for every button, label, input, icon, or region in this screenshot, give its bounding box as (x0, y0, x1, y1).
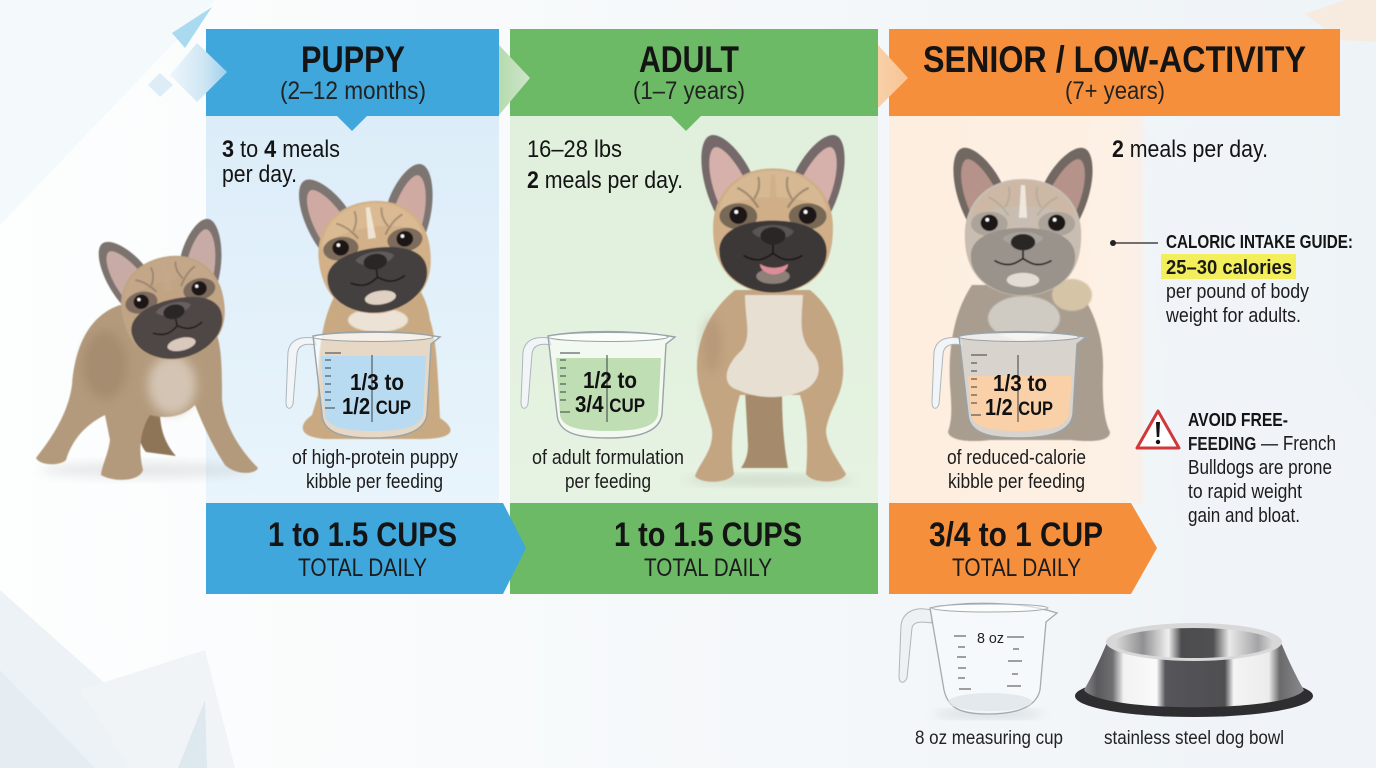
icon: 8 oz measuring cup: 8 oz (977, 630, 1004, 647)
caption: measuring cup: 8 oz measuring cup (915, 728, 1063, 749)
dog: senior (948, 148, 1110, 441)
dog: adult (685, 135, 855, 485)
measuring cup: adult: 1/2 to (583, 367, 637, 393)
callout: avoid free-feeding: gain and bloat. (1188, 505, 1300, 527)
header: adult: (1–7 years) (633, 77, 745, 105)
measuring cup: senior (932, 332, 1086, 438)
footer: senior total: TOTAL DAILY (952, 554, 1081, 582)
caption: dog bowl: stainless steel dog bowl (1104, 728, 1284, 749)
header: senior (889, 29, 1340, 116)
senior portion caption: kibble per feeding (948, 471, 1085, 493)
puppy portion caption: of high-protein puppy (292, 447, 458, 469)
icon: warning triangle (1137, 411, 1179, 448)
adult meals text (527, 136, 683, 194)
measuring cup: senior: 1/2 CUP (985, 394, 1053, 420)
puppy meals text: 3 to 4 meals (222, 136, 340, 163)
measuring cup: puppy (286, 332, 440, 438)
footer: adult total (510, 503, 878, 594)
footer: adult total: TOTAL DAILY (644, 554, 772, 582)
footer: puppy total: 1 to 1.5 CUPS (268, 516, 457, 554)
senior meals text: 2 meals per day. (1112, 136, 1268, 163)
callout: avoid free-feeding (1188, 410, 1336, 527)
measuring cup: adult (521, 332, 675, 438)
panel: senior background (889, 116, 1143, 504)
footer: senior total (889, 503, 1157, 594)
puppy portion caption (292, 447, 458, 493)
icon: 8 oz measuring cup (899, 603, 1057, 718)
footer: puppy total: TOTAL DAILY (298, 554, 427, 582)
panel: adult background (510, 116, 878, 504)
arrow: adult to senior (878, 45, 908, 108)
adult meals text: 16–28 lbs (527, 136, 622, 163)
dog: sitting puppy (297, 163, 451, 439)
callout: caloric intake guide: 25–30 calories (1166, 257, 1292, 279)
callout: avoid free-feeding: Bulldogs are prone (1188, 457, 1332, 479)
header: puppy (206, 29, 499, 131)
callout: avoid free-feeding: to rapid weight (1188, 481, 1302, 503)
measuring cup: adult: 3/4 CUP (575, 391, 645, 417)
header: puppy: PUPPY (301, 39, 405, 80)
header: senior: (7+ years) (1065, 77, 1165, 105)
footer: senior total: 3/4 to 1 CUP (929, 516, 1103, 554)
measuring cup: puppy: 1/2 CUP (342, 393, 411, 419)
adult portion caption (532, 447, 684, 493)
adult portion caption: of adult formulation (532, 447, 684, 469)
measuring cup: senior: 1/3 to (993, 370, 1047, 396)
decorative blue arrow shapes (148, 7, 227, 102)
panel: puppy background (206, 116, 499, 504)
header: senior: SENIOR / LOW-ACTIVITY (923, 39, 1306, 80)
measuring cup: puppy: 1/3 to (350, 369, 404, 395)
footer: adult total: 1 to 1.5 CUPS (614, 516, 802, 554)
senior portion caption (947, 447, 1086, 493)
callout: caloric intake guide: per pound of body (1166, 281, 1309, 303)
adult meals text: 2 meals per day. (527, 167, 683, 194)
callout: avoid free-feeding: AVOID FREE- (1188, 410, 1288, 430)
arrow: puppy to adult (499, 45, 530, 115)
adult portion caption: per feeding (565, 471, 651, 493)
header: puppy: (2–12 months) (280, 77, 426, 105)
callout: avoid free-feeding: FEEDING — French (1188, 433, 1336, 455)
puppy meals text (222, 136, 340, 188)
callout: caloric intake guide (1110, 232, 1353, 327)
puppy portion caption: kibble per feeding (306, 471, 443, 493)
icon: stainless steel dog bowl (1075, 623, 1313, 717)
header: adult (510, 29, 878, 131)
callout: caloric intake guide: weight for adults. (1165, 305, 1301, 327)
header: adult: ADULT (639, 39, 739, 80)
footer: puppy total (206, 503, 526, 594)
dog: standing puppy (36, 217, 258, 480)
puppy meals text: per day. (222, 161, 297, 188)
senior portion caption: of reduced-calorie (947, 447, 1086, 469)
